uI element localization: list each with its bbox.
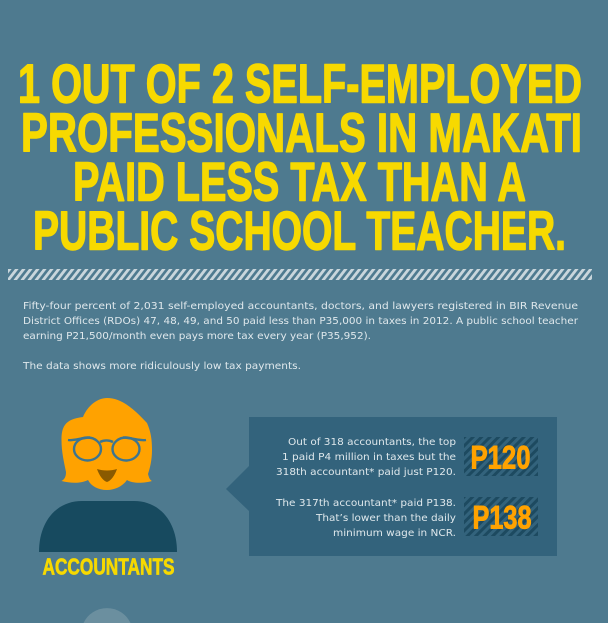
callout text: P120: 318th accountant* paid just P120. — [276, 467, 456, 478]
callout text: P138: That’s lower than the daily — [315, 513, 456, 524]
intro text — [22, 301, 579, 372]
next figure head, cropped — [84, 608, 130, 623]
stat: P120: P120 — [470, 440, 530, 476]
callout text: P120: 1 paid P4 million in taxes but the — [282, 452, 456, 463]
callout text: P120 — [276, 437, 456, 478]
intro text: Fifty-four percent of 2,031 self-employed accountants, doctors, and lawyers registered in BIR Revenue — [23, 301, 578, 312]
intro text: earning P21,500/month even pays more tax every year (P35,952). — [23, 331, 371, 342]
panel: accountants callout — [226, 417, 557, 556]
callout text: P138: The 317th accountant* paid P138. — [275, 498, 456, 509]
hair and face — [62, 398, 152, 490]
mouth — [97, 469, 117, 482]
callout text: P138: minimum wage in NCR. — [333, 528, 456, 539]
glasses — [68, 438, 146, 460]
icon: accountant figure — [39, 398, 177, 552]
hatched divider — [8, 269, 592, 280]
label: accountants: ACCOUNTANTS — [42, 554, 174, 580]
title — [18, 52, 582, 262]
callout text: P138 — [275, 498, 456, 539]
intro text: District Offices (RDOs) 47, 48, 49, and 50 paid less than P35,000 in taxes in 2012. A public school teacher — [23, 316, 579, 327]
stat: P138: P138 — [472, 500, 532, 536]
intro text: The data shows more ridiculously low tax payments. — [22, 361, 301, 372]
shoulders — [39, 501, 177, 552]
callout text: P120: Out of 318 accountants, the top — [288, 437, 456, 448]
